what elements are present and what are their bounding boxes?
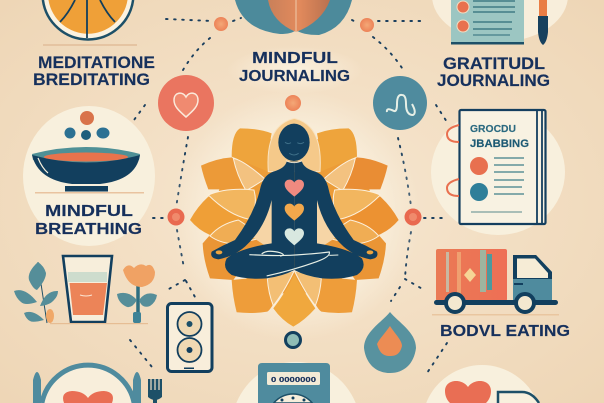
panel: bowl: [23, 106, 155, 246]
panel: notebook: [431, 109, 565, 235]
central glow: [170, 90, 420, 340]
icon: teal symbol circle: [373, 76, 427, 130]
lotus base fill: [215, 136, 374, 294]
icon: truck: [432, 249, 559, 316]
heading: mindful journaling: JOURNALING: [239, 68, 350, 85]
leg lines: [249, 251, 329, 276]
heading: meditation: MEDITATIONE: [38, 53, 155, 72]
heading: gratitude journaling: [437, 54, 550, 90]
hearts: [285, 180, 304, 245]
panel: bottom centre timer: 0 0000000: [271, 377, 316, 384]
icon: flower: [117, 264, 157, 323]
torso backing: [247, 187, 342, 247]
icon: binder rings: [447, 125, 459, 196]
heading: mindful breathing: MINDFUL: [45, 203, 133, 220]
icon: heart circle: [158, 75, 214, 131]
underline: [43, 44, 137, 46]
lotus petals: [190, 128, 294, 313]
lotus petals mirrored: [294, 128, 399, 313]
heading: gratitude journaling: GRATITUDL: [443, 54, 545, 73]
bottom petal: [273, 275, 315, 327]
icon: notebook cover: [460, 110, 546, 224]
icon: top centre lotus badge: [235, 0, 352, 35]
face: [285, 142, 304, 155]
notebook title: GROCDU: [470, 123, 516, 135]
icon: glass of juice: [63, 256, 112, 322]
badge: top-left meditation circle: [43, 0, 133, 39]
heading: gratitude journaling: JOURNALING: [437, 71, 550, 90]
icon: tablet: [168, 304, 212, 372]
heading: mindful breathing: [35, 203, 142, 238]
heading: meditation: [33, 53, 155, 89]
panel: bottom-right heart and truck: [426, 365, 539, 403]
heading: mindful journaling: [227, 46, 363, 94]
heading: meditation: BREDITATING: [33, 70, 150, 89]
ground line: [50, 323, 148, 324]
icon: water drop badge: [364, 312, 416, 373]
notebook list: [470, 157, 524, 212]
notebook title: [470, 123, 529, 150]
heading: mindful breathing: BREATHING: [35, 221, 142, 238]
panel: top-right notepad: [432, 0, 568, 45]
icon: dots above bowl: [64, 111, 110, 140]
icon: small donut: [286, 332, 300, 348]
heading: body eating: BODVL EATING: [440, 323, 570, 340]
panel: bottom centre timer: [236, 362, 356, 403]
aura behind head: [268, 118, 320, 172]
notebook title: JBABBING: [470, 138, 529, 150]
icon: plate with heart: [33, 365, 162, 403]
central lotus with meditating figure: [190, 118, 399, 327]
heading: mindful journaling: MINDFUL: [252, 50, 338, 67]
connector dotted lines: [130, 18, 447, 373]
icon: bowl: [32, 147, 144, 194]
icon: plant left: [14, 262, 58, 323]
figure: [211, 124, 377, 279]
connector dots: [168, 17, 422, 226]
